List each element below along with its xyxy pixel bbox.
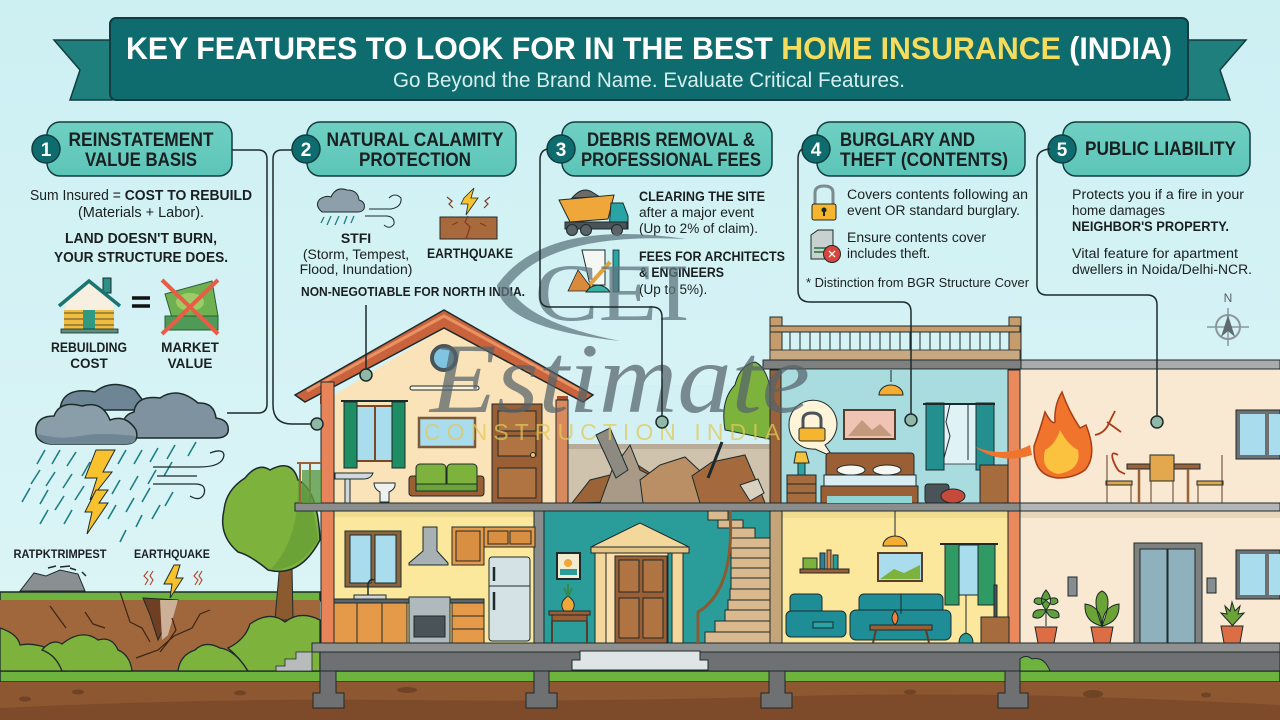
vent bar [410, 386, 479, 390]
roof slab [763, 360, 1280, 369]
round attic window [432, 346, 456, 370]
front door with pediment [591, 523, 689, 643]
pill heading 4: 4 [811, 140, 822, 161]
pill heading 2 [292, 122, 516, 176]
foyer [549, 511, 770, 643]
icon: house with bricks [59, 278, 120, 333]
icon: padlock [812, 186, 836, 220]
section 1: reinstatement value basis [30, 122, 252, 371]
non-negotiable note: NON-NEGOTIABLE FOR NORTH INDIA. [301, 285, 525, 299]
upper left room [334, 328, 568, 503]
gable roof [295, 310, 593, 404]
connector end dot 3 [656, 416, 668, 428]
pill heading 3: PROFESSIONAL FEES [581, 150, 761, 171]
footings [313, 671, 1028, 708]
clearing the site text: after a major event [639, 205, 754, 220]
icon: rock pile [20, 566, 86, 591]
tree [223, 466, 320, 620]
fees text [639, 249, 785, 297]
stfi text: Flood, Inundation) [300, 261, 412, 277]
icon: earthquake [440, 188, 497, 239]
icon: compass [1207, 291, 1249, 346]
book shelf [800, 550, 849, 573]
counter and base cabinets [334, 580, 484, 643]
watermark: Estimate [428, 323, 810, 434]
pill heading 1: 1 [41, 140, 52, 161]
icon: small bolt [144, 565, 202, 598]
pill heading 1: VALUE BASIS [85, 150, 197, 171]
balcony [770, 317, 1021, 361]
clearing the site text: CLEARING THE SITE [639, 189, 765, 204]
icon: dump truck [559, 190, 628, 236]
rebuilding cost label: REBUILDING [51, 340, 127, 355]
clearing the site text [639, 189, 765, 236]
earthquake label: EARTHQUAKE [427, 246, 513, 261]
bushes [0, 615, 320, 671]
watermark: CEI [534, 247, 690, 338]
stfi text: STFI [341, 230, 371, 246]
materials text: (Materials + Labor). [78, 205, 204, 221]
covers contents text [847, 187, 1028, 218]
staircase [698, 511, 770, 643]
stfi text: (Storm, Tempest, [303, 246, 409, 262]
upper right window [1236, 410, 1280, 459]
lock speech bubble [789, 400, 837, 457]
foyer wall [544, 511, 770, 643]
potted plant three [1221, 602, 1244, 643]
ensure contents text: includes theft. [847, 246, 930, 261]
living room wall [782, 511, 1009, 643]
section 3: debris removal and fees [547, 122, 785, 297]
pill heading 5 [1048, 122, 1250, 176]
bedroom picture [844, 410, 895, 439]
pill heading 5: 5 [1057, 140, 1068, 161]
protects text: NEIGHBOR'S PROPERTY. [1072, 219, 1229, 234]
pendant lamp [883, 511, 907, 546]
wall switches [1068, 577, 1216, 596]
section 4: burglary and theft [802, 122, 1029, 290]
connector end dot 2 [360, 369, 372, 381]
connector end dot 4 [905, 414, 917, 426]
ensure contents text [847, 230, 987, 261]
middle floor slab [295, 503, 1280, 511]
pill heading 2: 2 [301, 140, 311, 161]
vital feature text [1072, 246, 1252, 277]
living room window [940, 544, 998, 605]
broken window with curtains [923, 403, 995, 470]
vital feature text: dwellers in Noida/Delhi-NCR. [1072, 262, 1252, 277]
market value label: VALUE [168, 356, 212, 371]
foyer picture [557, 553, 580, 579]
rain [22, 442, 196, 542]
right apartment ground floor [1033, 543, 1280, 643]
distinction note: * Distinction from BGR Structure Cover [806, 276, 1029, 290]
protects text [1072, 187, 1245, 234]
fees text: (Up to 5%). [639, 282, 707, 297]
pill heading 2: PROTECTION [359, 150, 471, 171]
section 5: public liability [1048, 122, 1252, 277]
landscape picture [878, 553, 922, 581]
rebuilding cost label: COST [70, 356, 108, 371]
upper cabinets [452, 527, 535, 565]
pill heading 2: NATURAL CALAMITY [326, 130, 504, 151]
fees text: & ENGINEERS [639, 265, 724, 280]
section 2: natural calamity protection [292, 122, 525, 299]
fire icon [975, 392, 1125, 478]
covers contents text: Covers contents following an [847, 187, 1028, 202]
dining set [1106, 455, 1223, 503]
connector 2 [273, 150, 312, 424]
debris bay background [568, 385, 770, 503]
bedroom contents [787, 370, 1008, 503]
door [492, 404, 542, 503]
small tree behind bedroom [724, 362, 774, 440]
bed [821, 453, 918, 503]
fees text: FEES FOR ARCHITECTS [639, 249, 785, 264]
protects text: home damages [1072, 203, 1165, 218]
nightstand and lamp [787, 452, 816, 503]
range hood [409, 527, 448, 565]
market value label: MARKET [161, 340, 220, 355]
window with curtains [341, 401, 408, 468]
potted plant two [1085, 591, 1119, 643]
lightning bolts [85, 450, 115, 534]
teal sofa [850, 594, 951, 640]
pill heading 4 [802, 122, 1025, 176]
sum insured text: Sum Insured = COST TO REBUILD [30, 188, 252, 204]
icon: document with cross [811, 230, 840, 262]
earthquake label lower: EARTHQUAKE [134, 547, 210, 561]
rockfall label: RATPKTRIMPEST [14, 547, 107, 561]
left ground area [0, 466, 320, 671]
land statement [54, 230, 228, 266]
tv cabinet [959, 585, 1009, 643]
kitchen [334, 527, 535, 643]
upper left room contents [297, 401, 542, 503]
land statement: LAND DOESN'T BURN, [65, 230, 217, 247]
icon: compass: N [1224, 291, 1232, 305]
oven [409, 597, 450, 643]
pill heading 1: REINSTATEMENT [68, 130, 214, 151]
land statement: YOUR STRUCTURE DOES. [54, 249, 228, 266]
icon: storm [317, 189, 401, 227]
wall picture [419, 418, 475, 447]
ground crack [50, 592, 210, 658]
stolen bag [925, 484, 965, 503]
armchair [786, 594, 846, 637]
fridge [489, 557, 530, 641]
connector 5 [1037, 149, 1157, 416]
pill heading 1 [32, 122, 232, 176]
kitchen wall [334, 511, 534, 643]
storm clouds [36, 384, 228, 444]
icon: market value crossed out [162, 280, 218, 334]
pill heading 3: 3 [556, 140, 566, 161]
ensure contents text: Ensure contents cover [847, 230, 987, 245]
side table and vase [549, 584, 590, 643]
ground floor slab and foundation [276, 643, 1280, 671]
potted plant one [1033, 590, 1059, 643]
protects text: Protects you if a fire in your [1072, 187, 1245, 202]
connector 1 [227, 150, 267, 413]
hanging lamp [879, 370, 903, 395]
connector 2b [365, 305, 367, 369]
orange pillars [321, 370, 1020, 643]
subtitle: Go Beyond the Brand Name. Evaluate Critical Features. [393, 69, 905, 92]
pill heading 3: DEBRIS REMOVAL & [587, 130, 755, 151]
title: KEY FEATURES TO LOOK FOR IN THE BEST HOME INSURANCE (INDIA) [126, 30, 1172, 66]
connector 4 [798, 149, 911, 414]
pill heading 3 [547, 122, 772, 176]
right apartment lower wall [1020, 511, 1280, 643]
debris pile [572, 428, 765, 503]
green sofa [409, 464, 484, 496]
watermark: CONSTRUCTION INDIA [424, 419, 781, 445]
soil and grass ground [0, 592, 1280, 720]
market value label [161, 340, 220, 371]
pill heading 4: THEFT (CONTENTS) [840, 150, 1008, 171]
cabinet [980, 465, 1008, 503]
vital feature text: Vital feature for apartment [1072, 246, 1238, 261]
icon: architect tools [568, 250, 619, 292]
house structure [276, 310, 1280, 708]
right lower window [1236, 550, 1280, 599]
connector end dot 1 [311, 418, 323, 430]
right apartment upper wall [1020, 370, 1280, 503]
clearing the site text: (Up to 2% of claim). [639, 221, 758, 236]
pill heading 5: PUBLIC LIABILITY [1085, 139, 1236, 160]
elevator [1134, 543, 1202, 643]
bedroom wall [781, 370, 1009, 503]
covers contents text: event OR standard burglary. [847, 203, 1020, 218]
rebuilding cost label [51, 340, 127, 371]
watermark [424, 234, 810, 445]
pill heading 4: BURGLARY AND [840, 130, 975, 151]
equals sign [132, 298, 150, 306]
wind lines [153, 451, 224, 499]
living room [786, 511, 1009, 643]
connector end dot 5 [1151, 416, 1163, 428]
connector 3 [540, 149, 662, 416]
kitchen window [345, 531, 401, 587]
balcony rail [297, 463, 321, 503]
bathroom fixtures [335, 473, 395, 503]
stfi text [300, 230, 412, 277]
title banner [54, 18, 1246, 100]
coffee table [870, 611, 932, 643]
